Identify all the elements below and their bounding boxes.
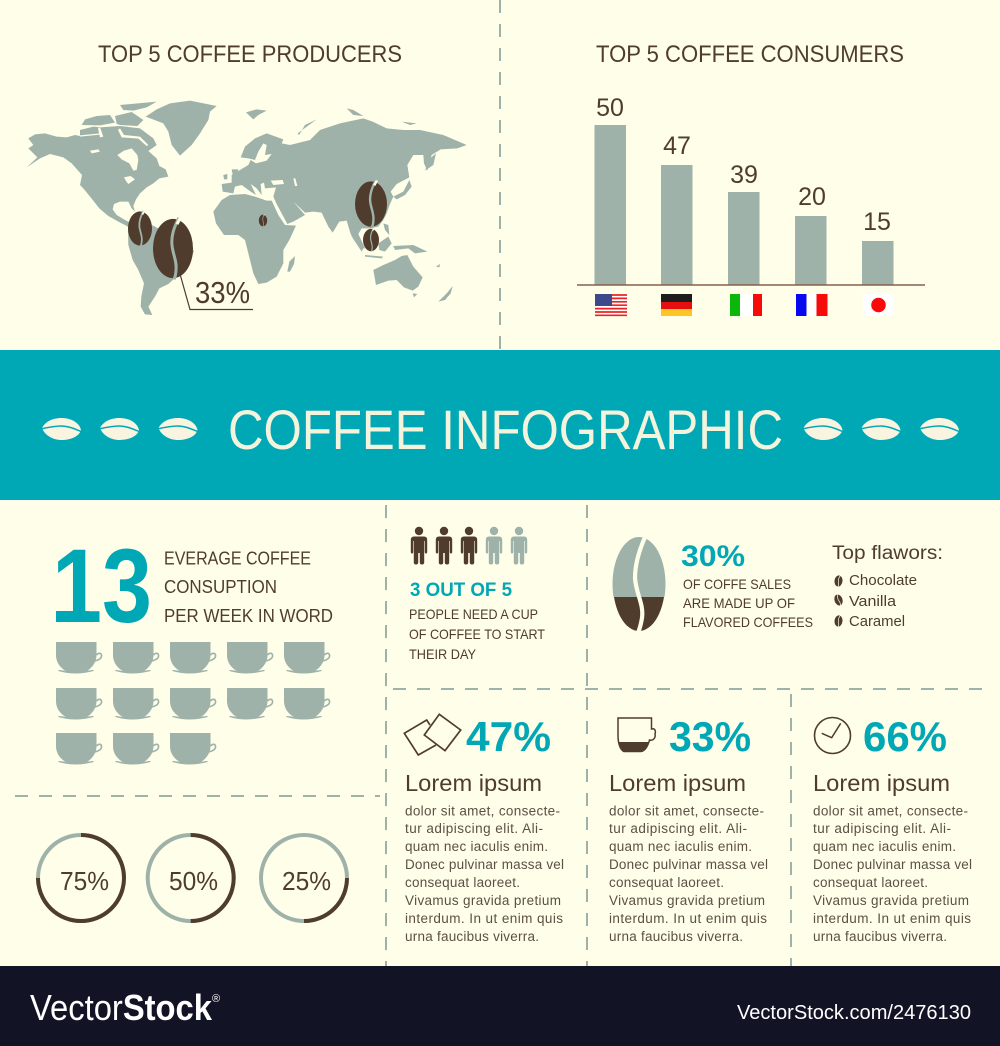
text: coffee sales: FLAVORED COFFEES (683, 614, 813, 630)
text: consumption description (164, 548, 333, 626)
panel: 33% column (609, 713, 768, 944)
panel: weekly consumption (52, 528, 333, 764)
body text: Vivamus gravida pretium (609, 893, 765, 908)
registered mark: ® (212, 993, 220, 1005)
bar chart: 47 (663, 132, 691, 160)
footer logo: VectorStock (30, 987, 213, 1028)
panel: top 5 coffee producers (27, 41, 467, 315)
text: consumption description: CONSUPTION (164, 577, 277, 597)
bar chart: 50 (596, 94, 624, 122)
body text: consequat laoreet. (813, 875, 928, 890)
icon: coffee cup (618, 718, 655, 752)
subheading: Lorem ipsum (405, 770, 542, 796)
big number 13: 13 (52, 528, 152, 645)
icon: half-filled coffee bean (612, 535, 666, 633)
panel: 3 out of 5 (409, 527, 545, 662)
flag: Italy (730, 294, 762, 316)
body text: dolor sit amet, consecte- (405, 804, 560, 818)
stat: 66%: 66% (863, 713, 947, 760)
flag: USA (595, 294, 627, 316)
text: consumption description: EVERAGE COFFEE (164, 548, 311, 568)
body text: interdum. In ut enim quis (813, 911, 971, 926)
footer bar (0, 966, 1000, 1046)
bar chart: 15 (863, 208, 891, 236)
callout: 33%: 33% (195, 275, 250, 310)
body text: urna faucibus viverra. (609, 929, 743, 944)
ring: 75%: 75% (60, 866, 109, 896)
flag: Japan (863, 294, 894, 316)
stat: 33%: 33% (669, 713, 751, 760)
text: coffee sales: OF COFFE SALES (683, 576, 791, 592)
panel: 66% column (813, 713, 972, 944)
body text: quam nec iaculis enim. (405, 839, 548, 854)
ring: 25% (261, 835, 347, 921)
text: people need coffee: THEIR DAY (409, 646, 477, 662)
body text: Vivamus gravida pretium (405, 893, 561, 908)
text: coffee sales: ARE MADE UP OF (683, 595, 795, 611)
text: people need coffee: OF COFFEE TO START (409, 626, 545, 642)
list: top flavors (832, 543, 943, 630)
coffee beans on map (128, 181, 387, 279)
ring: 50%: 50% (169, 866, 218, 896)
body text (609, 804, 768, 944)
body text: consequat laoreet. (405, 875, 520, 890)
icon: clock (814, 718, 850, 754)
bar chart: 39 (730, 161, 758, 189)
body text: urna faucibus viverra. (813, 929, 947, 944)
body text: quam nec iaculis enim. (609, 839, 752, 854)
title banner (0, 350, 1000, 500)
body text (813, 804, 972, 944)
icon: sugar cubes (404, 714, 461, 755)
body text: Donec pulvinar massa vel (813, 857, 972, 872)
body text: dolor sit amet, consecte- (813, 804, 968, 818)
panel: 47% column (404, 713, 564, 944)
list: top flavors: Top flawors: (832, 543, 943, 564)
icons: left beans (40, 418, 199, 440)
stat: 3 out of 5: 3 OUT OF 5 (410, 580, 512, 601)
body text: Donec pulvinar massa vel (405, 857, 564, 872)
subheading: Lorem ipsum (813, 770, 950, 796)
panel: 30% flavored (612, 535, 943, 633)
body text: quam nec iaculis enim. (813, 839, 956, 854)
text: consumption description: PER WEEK IN WORD (164, 606, 333, 626)
body text: interdum. In ut enim quis (405, 911, 563, 926)
body text: Donec pulvinar massa vel (609, 857, 768, 872)
body text: interdum. In ut enim quis (609, 911, 767, 926)
bar chart (577, 94, 925, 285)
body text: tur adipiscing elit. Ali- (405, 821, 543, 836)
icons: 13 cups (56, 642, 330, 764)
body text: tur adipiscing elit. Ali- (609, 821, 747, 836)
world map (27, 101, 467, 315)
body text: consequat laoreet. (609, 875, 724, 890)
bar chart: 20 (798, 183, 826, 211)
text: coffee sales (683, 576, 813, 630)
flag: Germany (661, 294, 692, 316)
body text: dolor sit amet, consecte- (609, 804, 764, 818)
stat: 47%: 47% (466, 713, 551, 760)
title: COFFEE INFOGRAPHIC (228, 398, 783, 461)
heading: consumers: TOP 5 COFFEE CONSUMERS (596, 41, 904, 68)
list: top flavors: Chocolate (849, 572, 917, 589)
ring: 75% (38, 835, 124, 921)
heading: producers: TOP 5 COFFEE PRODUCERS (98, 41, 402, 68)
text: people need coffee: PEOPLE NEED A CUP (409, 606, 538, 622)
flag: France (796, 294, 828, 316)
footer image id: VectorStock.com/2476130 (737, 1002, 971, 1024)
ring: 25%: 25% (282, 866, 331, 896)
hudson bay and inland seas (80, 127, 297, 186)
icons: right beans (802, 418, 960, 440)
body text: tur adipiscing elit. Ali- (813, 821, 951, 836)
panel: top 5 coffee consumers (577, 41, 925, 316)
list: top flavors: Vanilla (849, 593, 897, 610)
body text (405, 804, 564, 944)
ring: 50% (148, 835, 234, 921)
text: people need coffee (409, 606, 545, 662)
subheading: Lorem ipsum (609, 770, 746, 796)
list: top flavors: Caramel (849, 613, 905, 630)
body text: urna faucibus viverra. (405, 929, 539, 944)
stat: 30%: 30% (681, 540, 745, 573)
icons: people (411, 527, 527, 564)
panel: percent rings (38, 835, 347, 921)
body text: Vivamus gravida pretium (813, 893, 969, 908)
